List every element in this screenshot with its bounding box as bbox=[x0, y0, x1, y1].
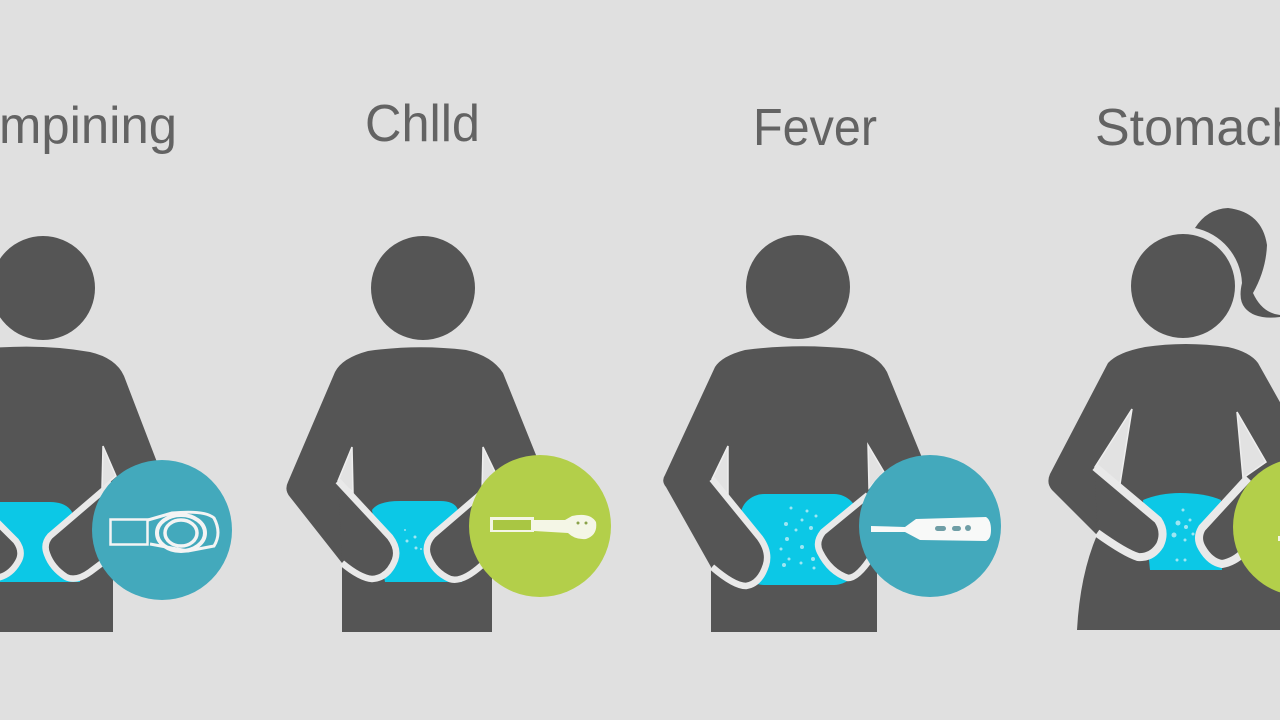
body silhouette bbox=[1048, 344, 1280, 630]
left hand bbox=[712, 479, 767, 586]
head bbox=[1131, 234, 1235, 338]
right hand bbox=[818, 495, 872, 578]
abdomen bbox=[740, 494, 858, 585]
icon circle: thermometer bbox=[859, 455, 1001, 597]
arm gap right bbox=[482, 447, 498, 492]
right hand bbox=[1199, 478, 1248, 564]
left hand bbox=[1095, 467, 1163, 557]
abdomen sparkle bbox=[1172, 508, 1194, 562]
abdomen bbox=[372, 501, 462, 582]
left hand bbox=[338, 481, 396, 579]
body silhouette bbox=[0, 347, 160, 632]
figure 2: child bbox=[286, 95, 611, 632]
abdomen bbox=[0, 502, 80, 582]
abdomen bbox=[1143, 493, 1222, 570]
head bbox=[0, 236, 95, 340]
ponytail bbox=[1195, 208, 1280, 318]
arm gap left bbox=[1095, 409, 1132, 484]
body silhouette bbox=[663, 346, 925, 632]
figure 3: fever bbox=[663, 99, 1001, 632]
left hand bbox=[0, 505, 21, 580]
abdomen dots bbox=[780, 506, 818, 570]
arm gap left bbox=[712, 446, 728, 497]
figure 4: stomach bbox=[1048, 99, 1280, 630]
heading: cramping: mpining bbox=[0, 97, 177, 155]
icon circle: cut off bbox=[1233, 458, 1280, 596]
body silhouette bbox=[286, 347, 540, 632]
arm gap bbox=[102, 446, 116, 488]
head bbox=[371, 236, 475, 340]
arm gap right bbox=[868, 445, 884, 488]
abdomen dots bbox=[404, 529, 422, 550]
icon circle: camera bbox=[92, 460, 232, 600]
head bbox=[746, 235, 850, 339]
right hand bbox=[46, 483, 112, 579]
heading: fever: Fever bbox=[753, 99, 877, 157]
right hand bbox=[427, 493, 482, 580]
arm gap right bbox=[1237, 412, 1266, 478]
arm gap left bbox=[338, 447, 353, 492]
heading: child: Chlld bbox=[365, 95, 480, 153]
icon circle: thermometer bbox=[469, 455, 611, 597]
figure 1: cramping bbox=[0, 97, 232, 632]
